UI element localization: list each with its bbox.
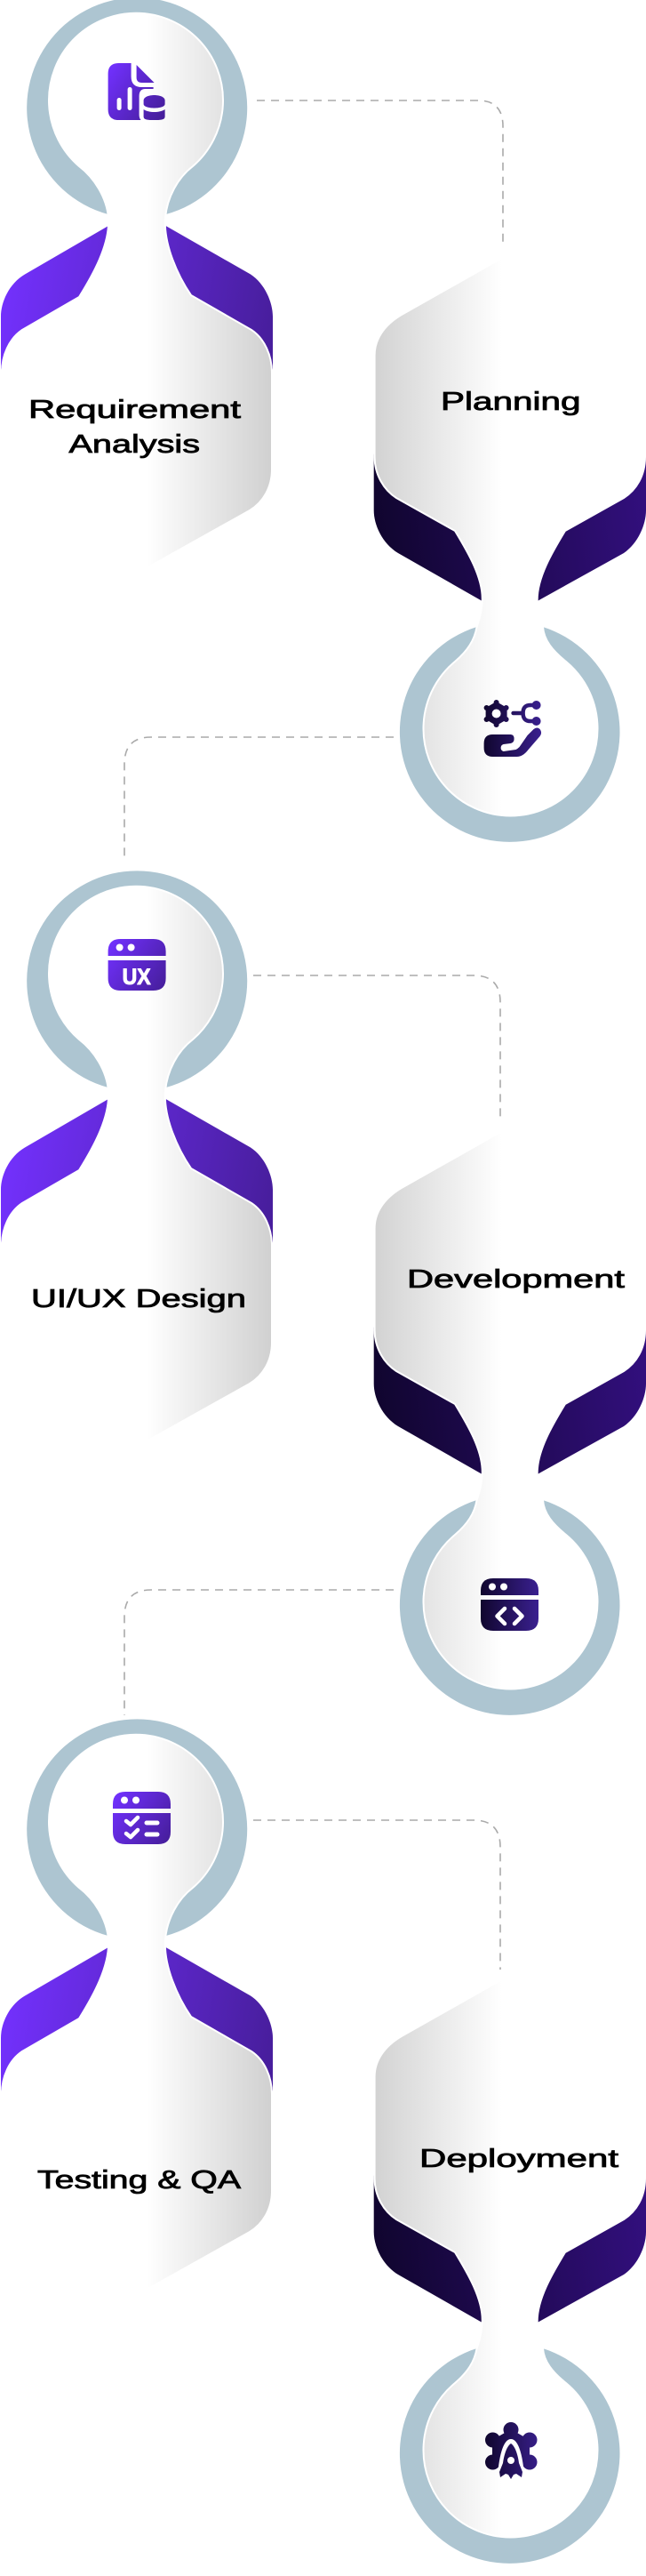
- panel: UI/UX Design: [1, 871, 273, 1447]
- icon: rocket in gear: [485, 2422, 537, 2479]
- connector: requirement to planning: [257, 100, 503, 245]
- heading: UI/UX Design: [31, 1285, 246, 1313]
- icon: checklist browser window: [113, 1792, 171, 1844]
- connector: testing to deployment: [253, 1820, 500, 1970]
- panel: Development: [374, 1127, 646, 1715]
- panel: Requirement Analysis: [1, 0, 273, 574]
- panel: Planning: [374, 253, 646, 842]
- connector: planning to UI/UX: [124, 737, 394, 862]
- connector: UI/UX to development: [253, 975, 500, 1120]
- heading: Development: [407, 1265, 625, 1294]
- heading: Analysis: [69, 430, 200, 459]
- icon: UX browser window: UX: [123, 965, 151, 990]
- heading: Deployment: [419, 2145, 618, 2173]
- heading: [28, 396, 241, 459]
- heading: Planning: [441, 388, 581, 416]
- icon: UX browser window: [108, 939, 166, 991]
- panel: Deployment: [374, 1975, 646, 2564]
- heading: Requirement: [28, 396, 241, 424]
- heading: Testing & QA: [37, 2166, 241, 2195]
- connector: development to testing: [124, 1590, 394, 1715]
- icon: gear, nodes and hand: [484, 700, 541, 757]
- panel: Testing & QA: [1, 1719, 273, 2295]
- icon: document with chart and database: [108, 63, 165, 120]
- icon: code browser window: [481, 1578, 538, 1631]
